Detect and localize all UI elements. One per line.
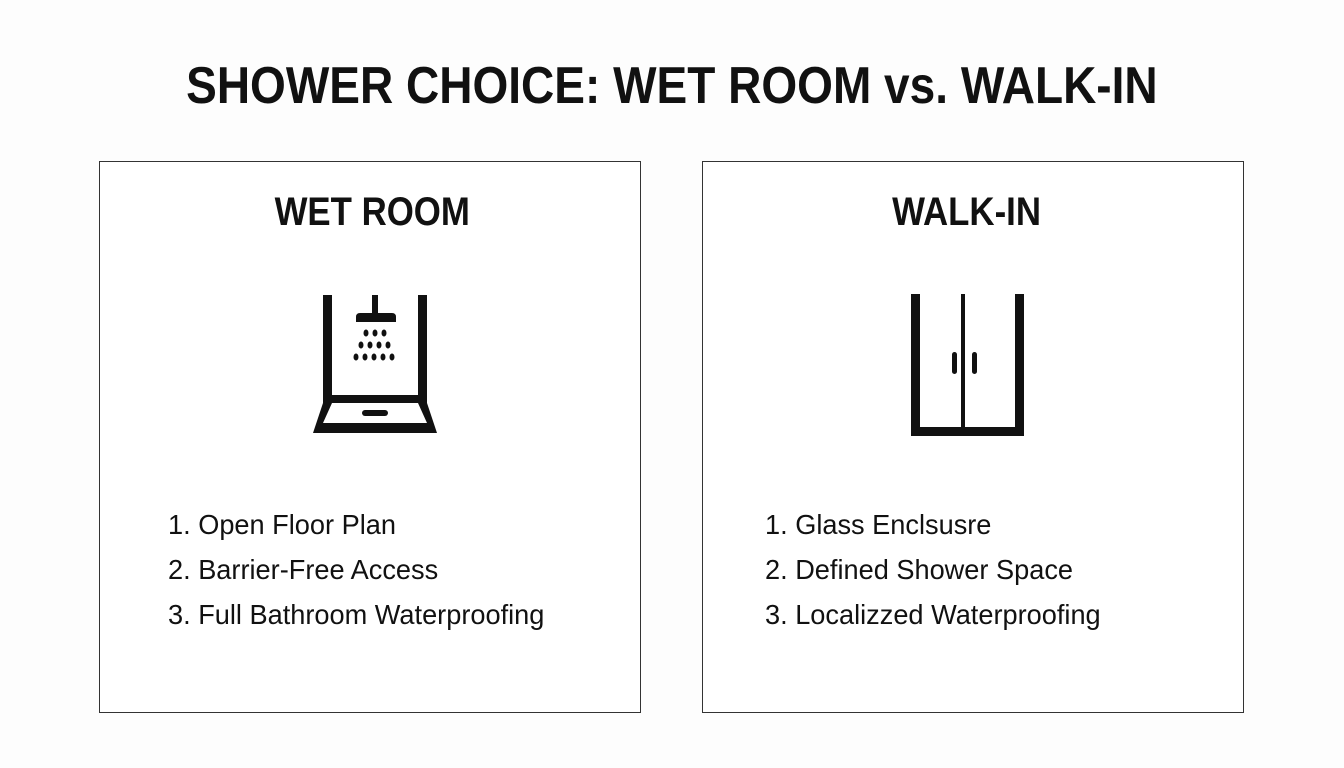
list: walk-in features: 2. Defined Shower Space	[765, 554, 1073, 585]
list: wet room features: 2. Barrier-Free Access	[168, 554, 438, 585]
list: walk-in features	[765, 509, 1101, 630]
heading: walk-in: WALK-IN	[893, 190, 1041, 234]
list: wet room features	[168, 509, 544, 630]
icon: wet room shower	[313, 295, 437, 433]
panel: wet room	[99, 161, 641, 713]
list: wet room features: 1. Open Floor Plan	[168, 509, 396, 540]
heading: wet room: WET ROOM	[274, 190, 470, 234]
list: walk-in features: 1. Glass Enclsusre	[765, 509, 991, 540]
panel: walk-in	[702, 161, 1244, 713]
title: SHOWER CHOICE: WET ROOM vs. WALK-IN	[186, 57, 1158, 115]
list: wet room features: 3. Full Bathroom Waterproofing	[168, 599, 544, 630]
icon: walk-in glass doors	[911, 294, 1024, 436]
list: walk-in features: 3. Localizzed Waterproofing	[765, 599, 1101, 630]
